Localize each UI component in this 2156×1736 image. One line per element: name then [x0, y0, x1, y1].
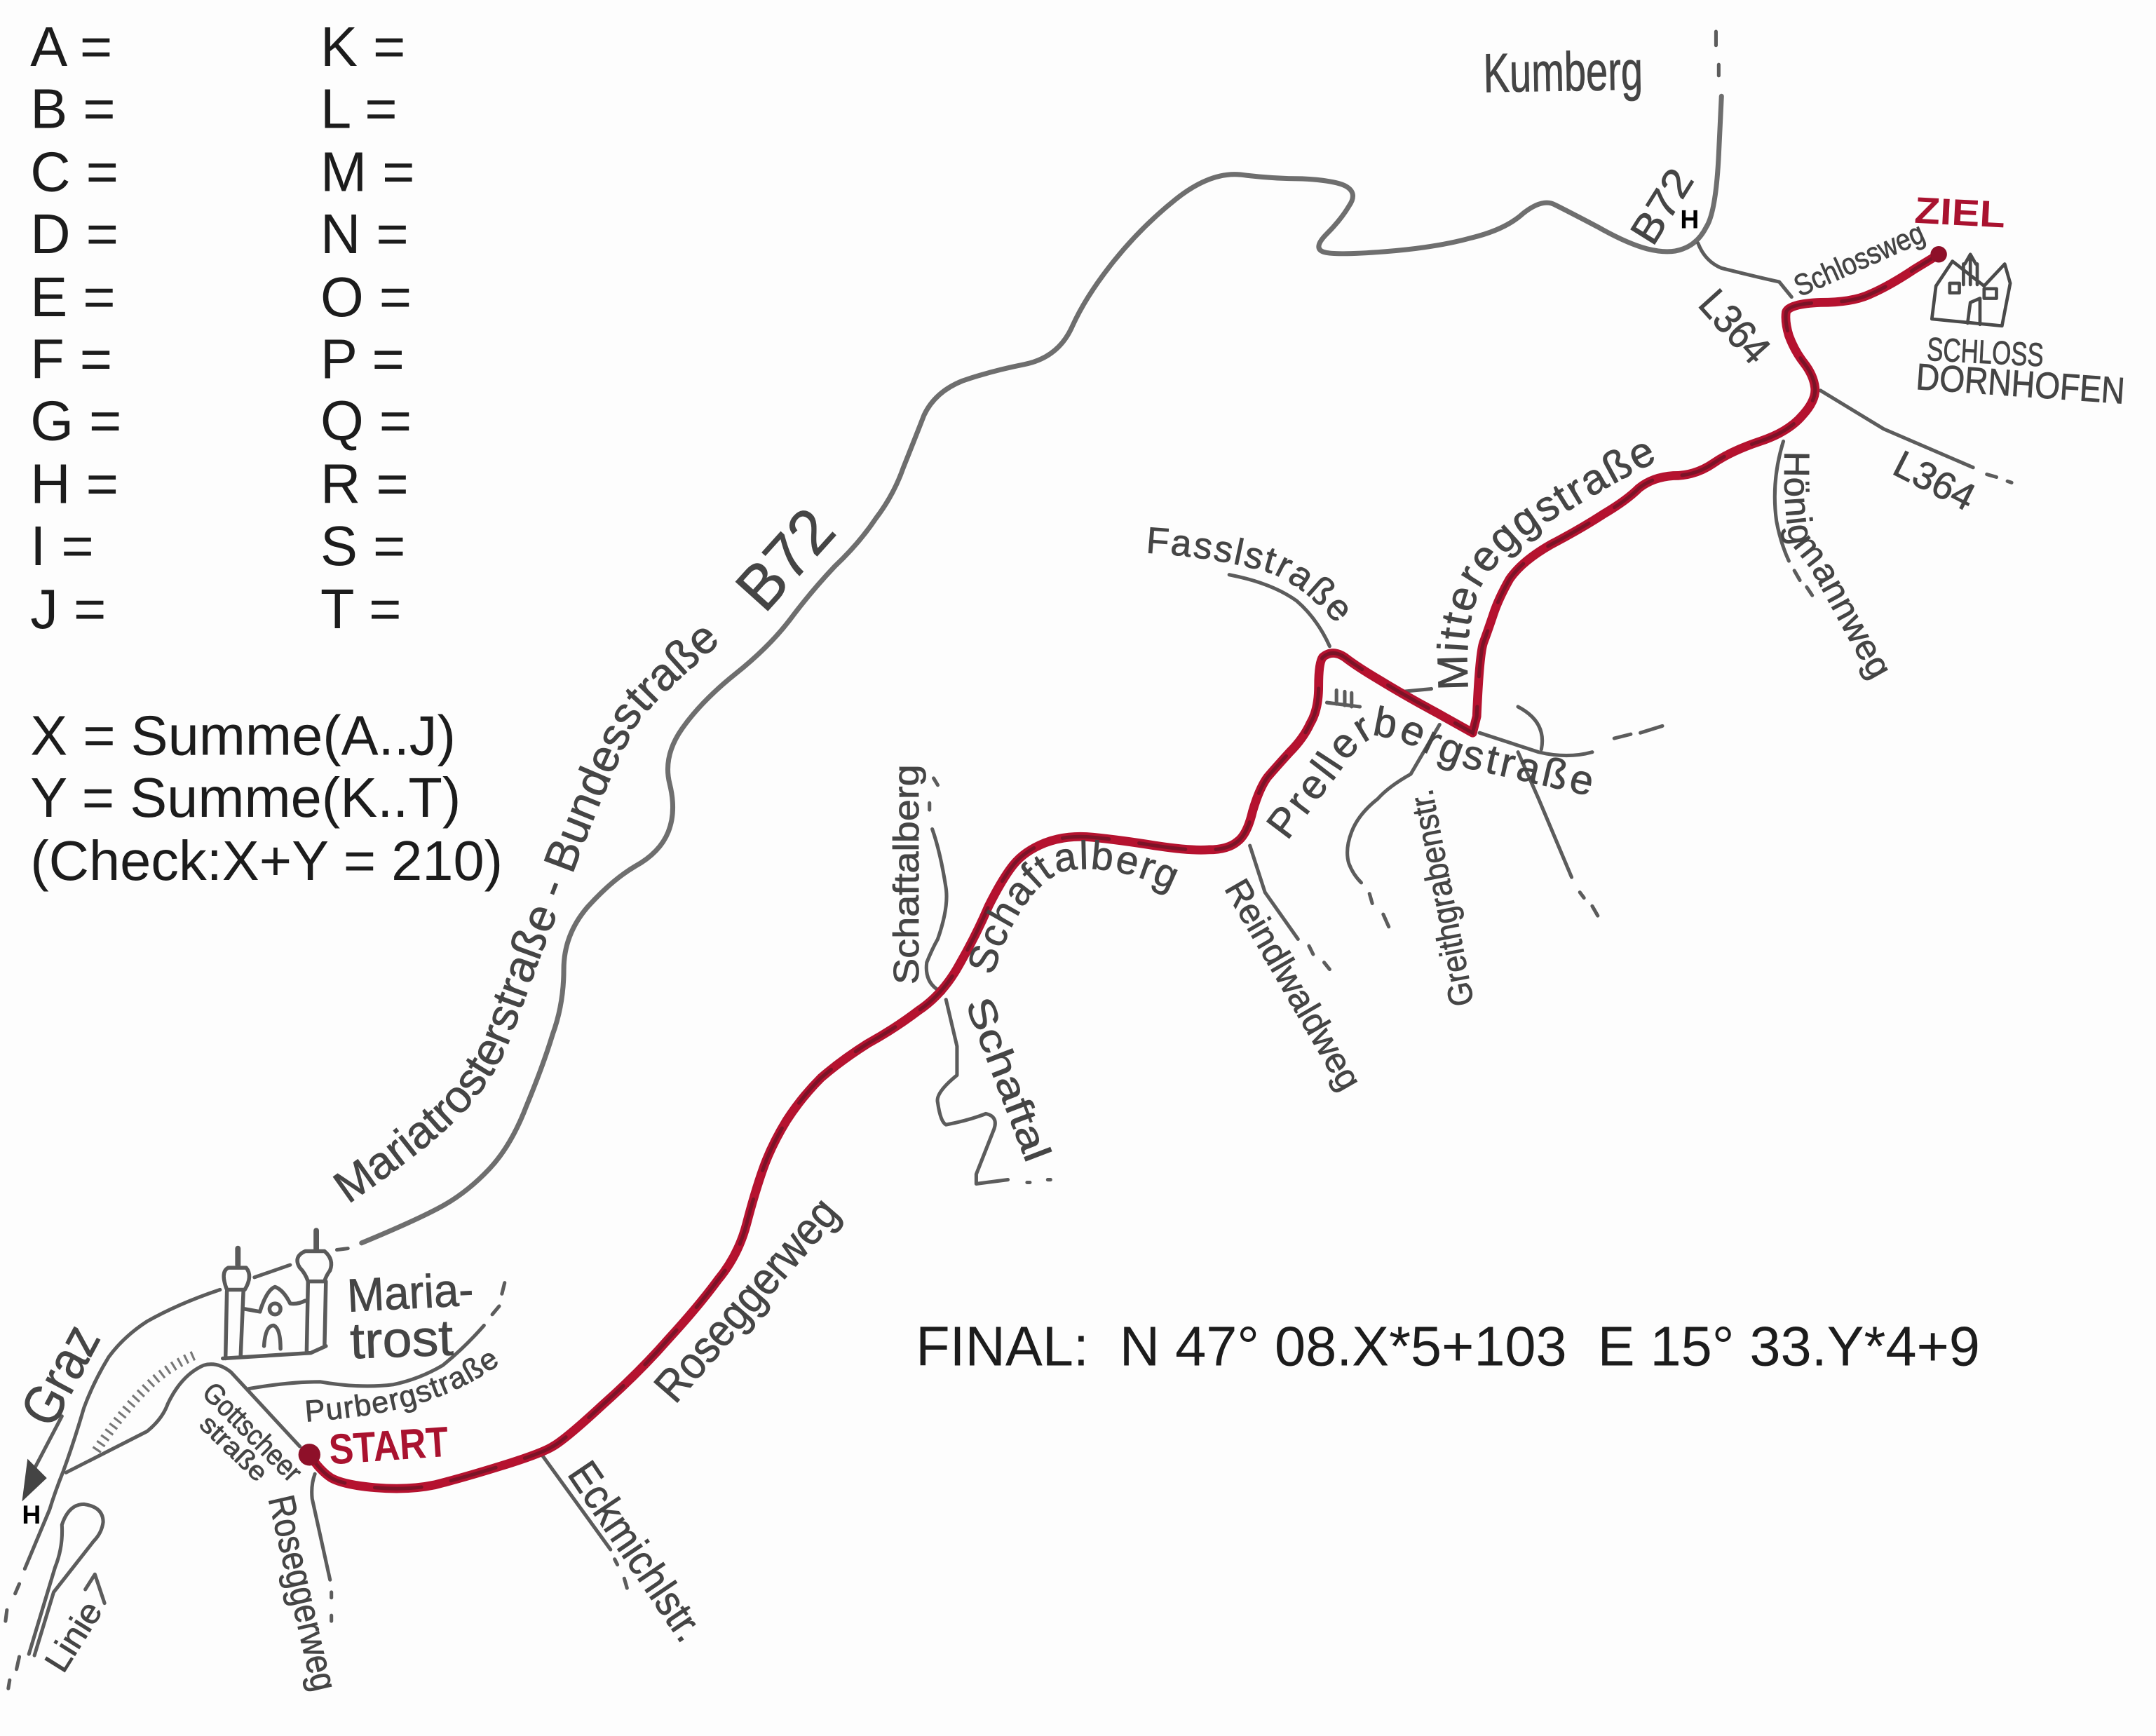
legend: letters K to T: P =	[320, 327, 405, 390]
formula block: Y = Summe(K..T)	[30, 766, 461, 829]
label: Greithgrabenstr: Greithgrabenstr.	[1402, 786, 1482, 1010]
label: Hoenigmannweg: Hönigmannweg	[1781, 454, 1888, 680]
label: Kumberg: Kumberg	[1483, 39, 1643, 104]
road: L364 north	[1698, 243, 1791, 297]
road: L364 south	[1820, 391, 2012, 482]
label: Mittereggstrasse: Mittereggstraße	[1436, 444, 1654, 688]
legend: letters A to J: A =	[30, 15, 112, 78]
road: Schaftalberg side road	[926, 778, 947, 993]
legend: letters A to J: E =	[30, 266, 116, 328]
label: Mariatrost	[346, 1263, 475, 1369]
label: B72 large: B72	[722, 495, 848, 624]
road: Prellerbergstrasse east	[1479, 726, 1662, 756]
legend: letters A to J: F =	[30, 327, 112, 390]
tram loop line 1	[8, 1504, 103, 1688]
road: side streets off Prellerbergstrasse	[1327, 689, 1598, 916]
final coordinates formula: FINAL: N 47° 08.X*5+103 E 15° 33.Y*4+9	[916, 1315, 1980, 1377]
label: Graz: Graz	[8, 1315, 112, 1435]
legend: letters K to T: Q =	[320, 390, 412, 452]
legend: letters K to T: T =	[320, 578, 401, 640]
label: Schlossweg: Schlossweg	[1789, 216, 1930, 304]
label: Schaftal: Schaftal	[957, 991, 1059, 1167]
start dot	[299, 1444, 320, 1465]
label: Schloss: SCHLOSS	[1926, 330, 2045, 374]
icon: Mariatrost church	[223, 1230, 331, 1359]
legend: letters K to T: K =	[320, 15, 405, 78]
label: Mariatrost: trost	[349, 1309, 454, 1369]
road: Graz main road	[6, 1265, 290, 1621]
legend: letters K to T: S =	[320, 515, 405, 577]
label: Mariatrosterstrasse - Bundesstrasse: Mariatrosterstraße - Bundesstraße	[332, 628, 717, 1203]
legend: letters A to J: G =	[30, 390, 121, 452]
road: Hoenigmannweg	[1775, 441, 1812, 595]
label: Roseggerweg branch: Roseggerweg	[260, 1491, 345, 1695]
label: L364 north: L364	[1690, 281, 1779, 372]
legend: letters A to J: C =	[30, 141, 118, 203]
label: L364 south: L364	[1887, 442, 1983, 519]
label: Linie 1: Linie	[38, 1594, 110, 1679]
legend: letters K to T: L =	[320, 77, 398, 140]
legend: letters A to J: H =	[30, 453, 118, 515]
label: Reindlwaldweg: Reindlwaldweg	[1217, 872, 1370, 1097]
road: Schaftal	[937, 1000, 1050, 1184]
formula block: (Check:X+Y = 210)	[30, 829, 503, 892]
label: Roseggerweg main: Roseggerweg	[644, 1187, 848, 1411]
label: Dornhofen: DORNHOFEN	[1915, 356, 2126, 412]
label: B72 top: B72	[1622, 161, 1703, 252]
legend: letters K to T: N =	[320, 203, 409, 265]
label: Mariatrost: Maria-	[346, 1263, 475, 1322]
label: strasse: straße	[194, 1409, 274, 1487]
legend: letters A to J	[30, 15, 121, 640]
arrow to Graz	[22, 1416, 62, 1501]
label: START: START	[327, 1418, 450, 1473]
legend: letters A to J: J =	[30, 578, 106, 640]
road: B72 main road	[337, 32, 1721, 1250]
label: Prellerbergstrasse: Prellerbergstraße	[1266, 705, 1592, 839]
legend: letters A to J: B =	[30, 77, 116, 140]
road: Gottscheer Strasse	[66, 1364, 300, 1472]
main route in red	[309, 255, 1939, 1489]
label: Schaftalberg along route: Schaftalberg	[969, 840, 1178, 972]
legend: letters K to T: R =	[320, 453, 409, 515]
road: Eckmichlstrasse	[542, 1455, 627, 1588]
railway hatch line	[96, 1355, 196, 1451]
marker: H bottom: H	[22, 1500, 41, 1529]
legend: letters A to J: D =	[30, 203, 118, 265]
icon: Schloss Dornhofen castle	[1932, 255, 2010, 326]
label: Eckmichlstr: Eckmichlstr.	[559, 1452, 714, 1650]
road: Purbergstrasse	[249, 1283, 505, 1389]
legend: letters K to T: M =	[320, 141, 415, 203]
label: Purbergstrasse: Purbergstraße	[306, 1353, 498, 1422]
road: Fasslstrasse	[1229, 575, 1329, 646]
goal dot	[1930, 246, 1947, 263]
label: Schaftalberg vertical: Schaftalberg	[886, 764, 926, 984]
legend: letters K to T: O =	[320, 266, 412, 328]
road: Reindlwaldweg	[1250, 846, 1329, 970]
formula block	[30, 705, 503, 892]
legend: letters A to J: I =	[30, 515, 94, 577]
road: Greithgrabenstrasse	[1348, 724, 1439, 927]
label: Gottscheer: Gottscheer	[196, 1376, 309, 1489]
label: Fasslstrasse: Fasslstraße	[1148, 527, 1348, 621]
formula block: X = Summe(A..J)	[30, 705, 456, 767]
legend: letters K to T	[320, 15, 415, 640]
label: ZIEL: ZIEL	[1913, 190, 2007, 236]
marker: H top: H	[1680, 205, 1699, 234]
road: Roseggerweg branch	[312, 1474, 332, 1621]
